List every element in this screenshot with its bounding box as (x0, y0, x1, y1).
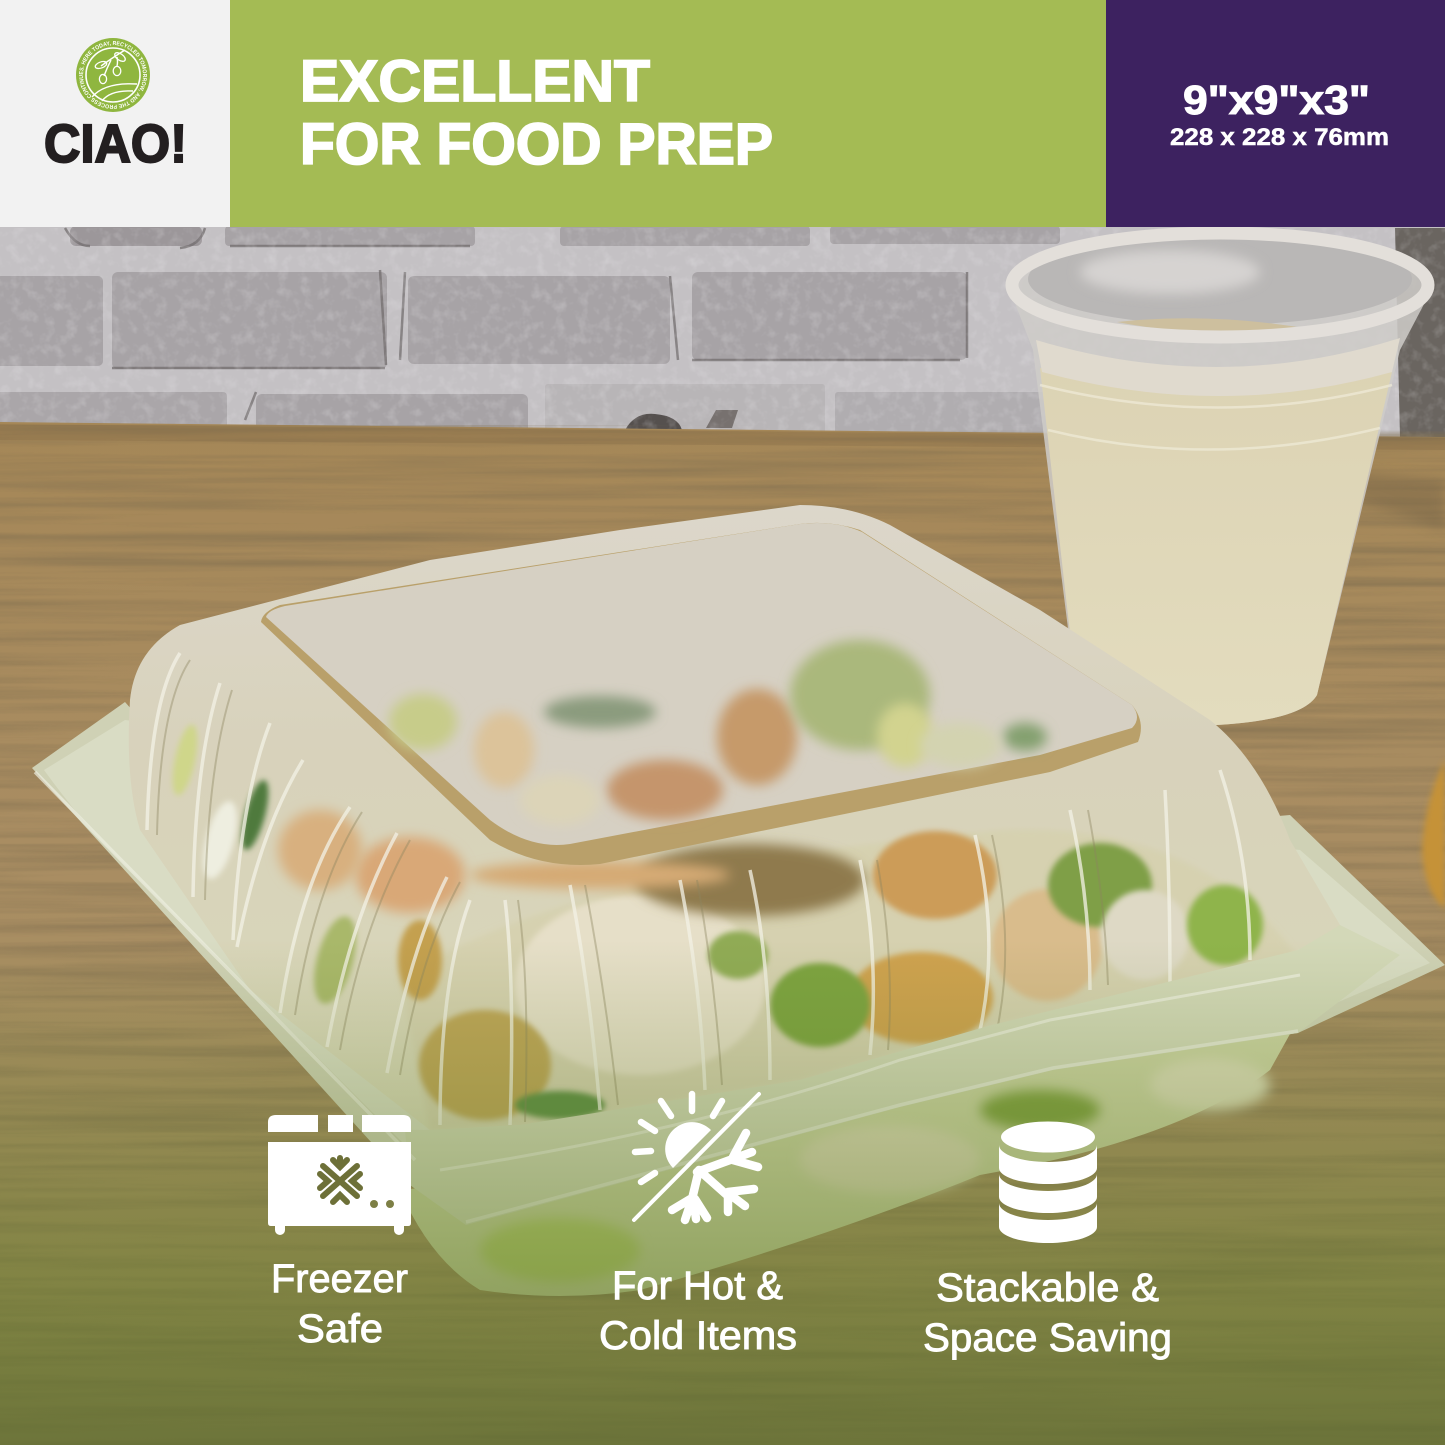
label: for hot and cold items: For Hot & (612, 1264, 783, 1308)
food item at right edge (1422, 760, 1445, 908)
label: stackable and space saving: Stackable & (936, 1266, 1159, 1310)
title panel (230, 0, 1106, 227)
front rim (405, 925, 1400, 1225)
label: stackable and space saving: Space Saving (923, 1316, 1172, 1360)
outer flange (32, 702, 1445, 1225)
feature: stackable and space saving (923, 1122, 1172, 1360)
icon: stacked containers (999, 1122, 1097, 1243)
header band (0, 0, 1445, 227)
food seen through lid (168, 723, 1300, 1130)
logo wordmark: CIAO! (44, 114, 187, 174)
icon: freezer (268, 1115, 411, 1235)
title text (300, 49, 773, 177)
feature: freezer safe (268, 1115, 411, 1351)
lid dome (129, 505, 1340, 1130)
icon: sun and snowflake (634, 1094, 759, 1220)
logo emblem: olive branch seal: AND THE PROCESS CONTINUES. HERE TODAY, RECYCLED TOMORROW, (79, 41, 147, 109)
lower base with greens (400, 1025, 1295, 1296)
feature: for hot and cold items (599, 1094, 797, 1358)
label: freezer safe: Safe (297, 1307, 383, 1351)
logo panel (0, 0, 230, 227)
label: for hot and cold items: Cold Items (599, 1314, 797, 1358)
dimensions in inches: 9"x9"x3" (1183, 77, 1370, 123)
label: for hot and cold items (599, 1264, 797, 1358)
wooden table (0, 422, 1445, 1445)
title text: FOR FOOD PREP (300, 112, 773, 177)
lid ribs (147, 653, 1250, 1125)
label: freezer safe (271, 1257, 408, 1351)
size panel (1106, 0, 1445, 227)
label: stackable and space saving (923, 1266, 1172, 1360)
flat lid top (261, 523, 1141, 865)
label: freezer safe: Freezer (271, 1257, 408, 1301)
green gradient overlay (0, 940, 1445, 1445)
takeout container (32, 505, 1445, 1296)
dimensions in millimetres: 228 x 228 x 76mm (1170, 124, 1389, 151)
drinking cup with lemonade (1008, 230, 1434, 726)
title text: EXCELLENT (300, 49, 650, 114)
brick wall (0, 226, 1445, 438)
